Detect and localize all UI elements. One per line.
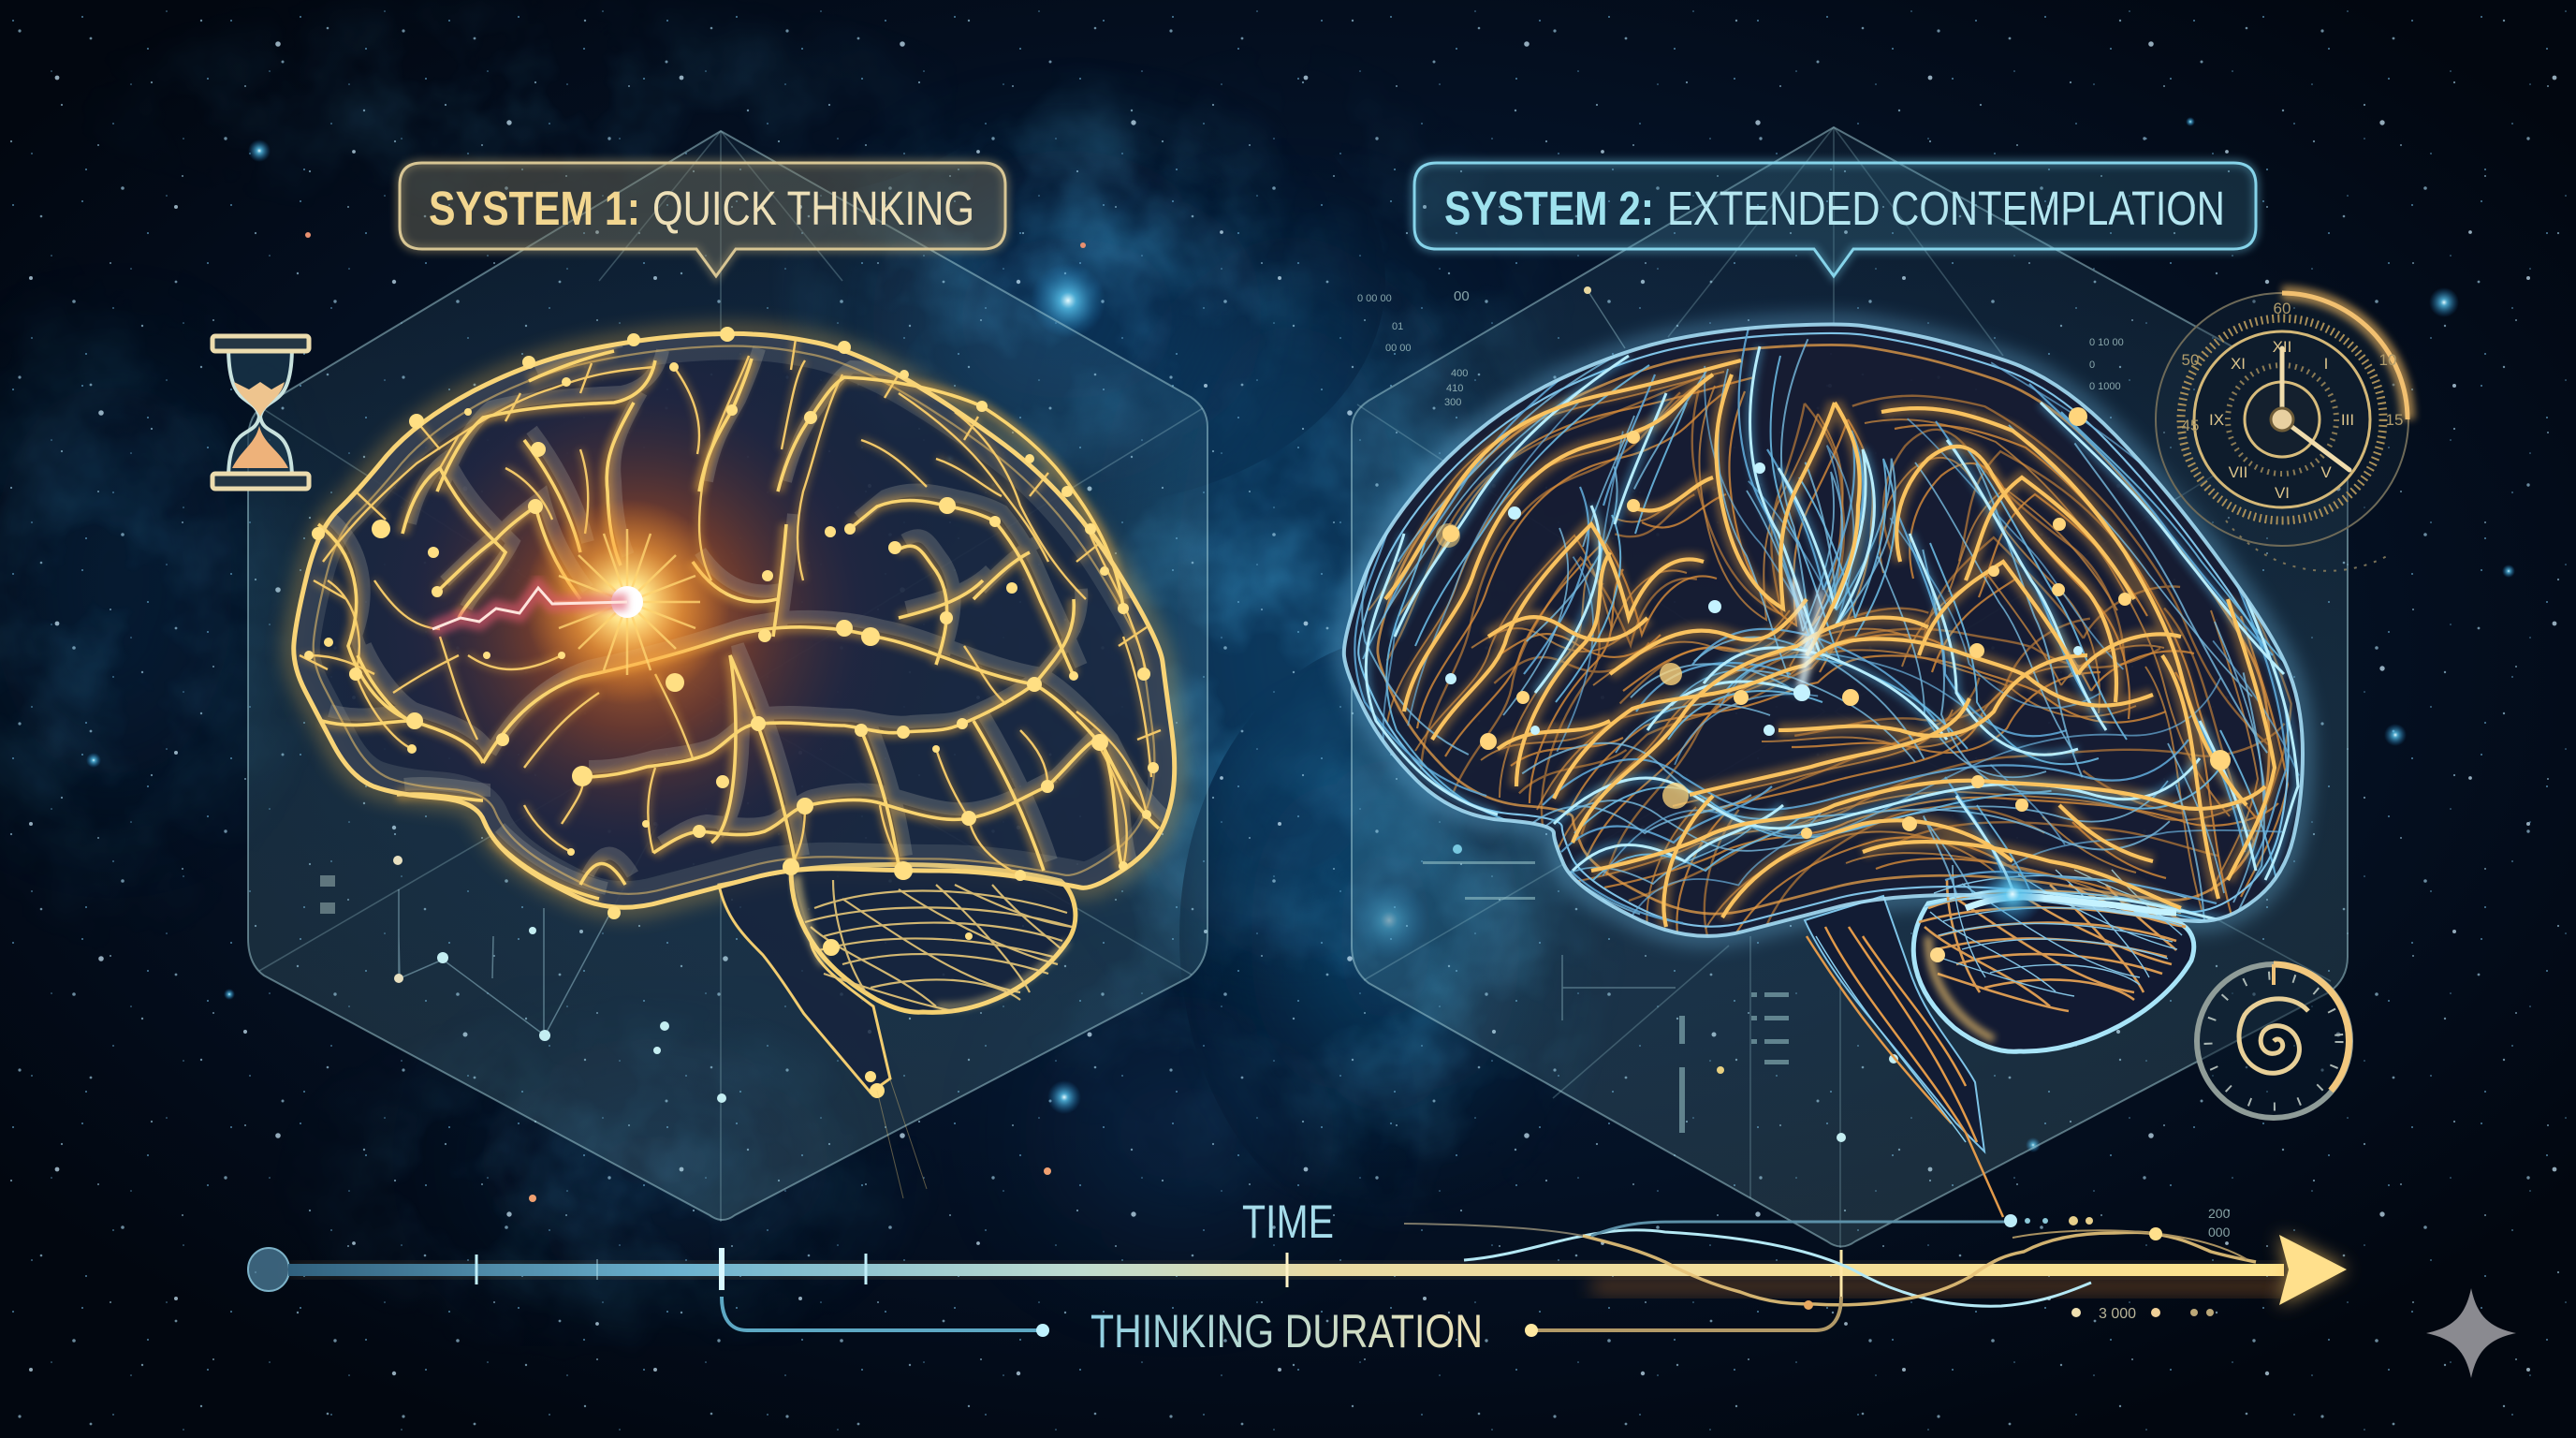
icon: clock: IX xyxy=(2209,411,2224,429)
small data readouts: 400 xyxy=(1451,368,1468,379)
cerebellum xyxy=(1913,865,2194,1051)
brain: System 2 (gold and blue network) xyxy=(1317,254,2355,1217)
icon: clock: VI xyxy=(2275,484,2290,502)
small data readouts: 300 xyxy=(1444,397,1461,408)
cerebellum xyxy=(791,865,1076,1012)
small data readouts xyxy=(1357,288,2231,1240)
label: thinking duration: THINKING DURATION xyxy=(1090,1305,1483,1357)
small data readouts: 0 xyxy=(2089,360,2095,371)
brain stem xyxy=(719,871,890,1093)
brain stem xyxy=(1805,896,1984,1152)
neural nodes xyxy=(304,327,1159,1098)
gyri lines xyxy=(318,351,1159,899)
label: TIME: TIME xyxy=(1242,1196,1334,1248)
icon: clock: XII xyxy=(2273,338,2291,356)
brain: System 1 (gold network) xyxy=(294,327,1175,1198)
timeline xyxy=(248,1196,2347,1357)
bright blue core xyxy=(1793,580,1821,688)
icon: clock xyxy=(2156,293,2408,571)
sine waves xyxy=(1404,1222,2256,1306)
neural nodes xyxy=(1436,407,2231,839)
panel label: System 2 xyxy=(1414,163,2256,276)
panel label: System 1: QUICK THINKING xyxy=(652,182,974,235)
panel: System 2 hexagon xyxy=(1352,127,2348,1248)
wave nodes xyxy=(1804,1214,2214,1317)
lightning signal xyxy=(432,588,627,629)
small data readouts: 00 00 xyxy=(1385,343,1412,354)
small data readouts: 410 xyxy=(1446,383,1463,394)
lobe sheen xyxy=(294,333,1175,907)
ticks xyxy=(476,1248,1841,1303)
icon: clock: 50 xyxy=(2182,351,2199,369)
panel: System 1 hexagon xyxy=(248,131,1208,1222)
small data readouts: 0 00 00 xyxy=(1357,293,1392,304)
arrow head xyxy=(2279,1235,2347,1305)
icon: clock: 10 xyxy=(2379,351,2396,369)
small data readouts: 200 xyxy=(2208,1206,2231,1221)
icon: clock: 60 xyxy=(2274,300,2291,317)
icon: clock: XI xyxy=(2231,355,2246,373)
icon: clock: 15 xyxy=(2386,411,2403,429)
time bar xyxy=(288,1264,2284,1276)
icon: hourglass xyxy=(212,336,309,489)
label text: SYSTEM 2: xyxy=(1444,182,1654,235)
icon: clock: I xyxy=(2324,355,2328,373)
small data readouts: 01 xyxy=(1392,321,1403,332)
icon: sparkle watermark xyxy=(2426,1288,2516,1378)
icon: clock: III xyxy=(2341,411,2354,429)
small data readouts: 000 xyxy=(2208,1225,2231,1240)
small data readouts: 0 10 00 xyxy=(2089,337,2124,348)
gyri lines xyxy=(1352,328,2301,936)
panel label: System 2: EXTENDED CONTEMPLATION xyxy=(1667,182,2225,235)
icon: clock: VII xyxy=(2229,463,2247,481)
panel label: System 1 xyxy=(400,163,1005,276)
label text: SYSTEM 1: xyxy=(429,182,640,235)
icon: spiral dial xyxy=(2197,964,2350,1118)
icon: clock: V xyxy=(2320,463,2332,481)
icon: clock: 45 xyxy=(2182,417,2199,434)
small data readouts: 00 xyxy=(1454,288,1470,304)
start node xyxy=(248,1248,289,1291)
bracket: system 1 duration xyxy=(722,1297,1049,1337)
activation burst xyxy=(524,499,730,705)
timeline: 3 000 xyxy=(2099,1306,2136,1322)
bracket: system 2 duration xyxy=(1525,1297,1841,1337)
small data readouts: 0 1000 xyxy=(2089,381,2121,392)
